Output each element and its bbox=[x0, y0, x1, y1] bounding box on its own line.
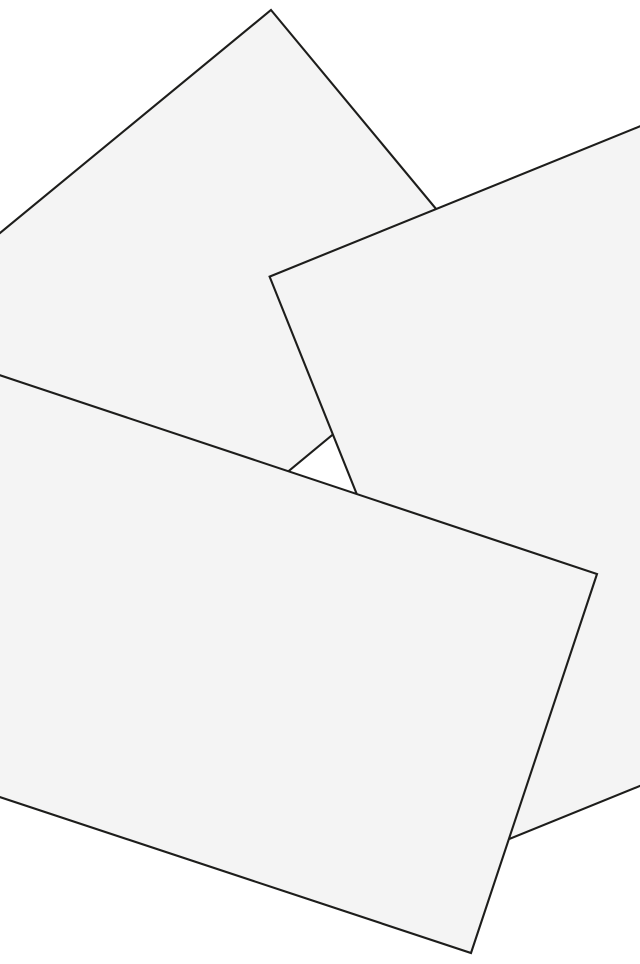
panel: right bbox=[270, 78, 640, 844]
panel: top left bbox=[0, 10, 505, 681]
panel: bottom bbox=[0, 342, 597, 953]
